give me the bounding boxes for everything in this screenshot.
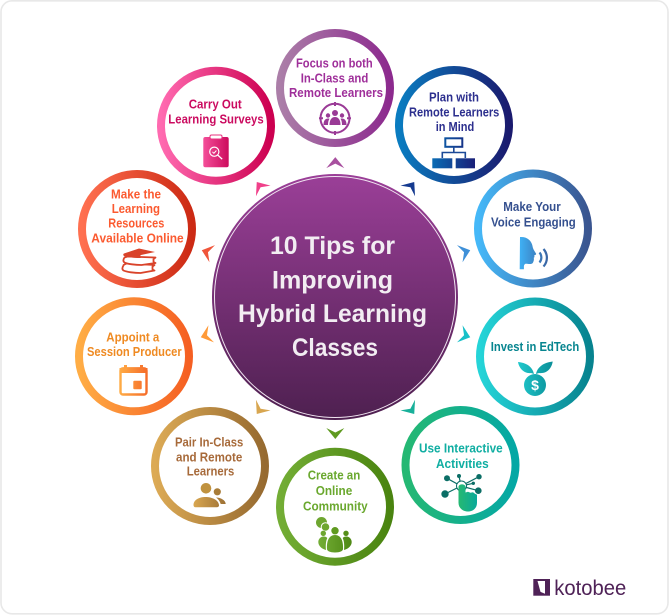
text: pair: Pair In-Class <box>175 436 243 450</box>
arrow: plan <box>400 177 422 196</box>
panel: carry out learning surveys <box>161 71 271 181</box>
arrow: interactive <box>400 400 422 419</box>
icon: community group <box>316 517 352 552</box>
central circle: title <box>212 174 458 420</box>
text: resources: Learning <box>112 202 160 216</box>
panel: make the learning resources available online <box>82 174 192 284</box>
panel: focus on both <box>280 33 390 143</box>
text: appoint: Appoint a <box>106 331 160 345</box>
icon: touch network <box>441 474 482 512</box>
icon: stack of books <box>122 248 156 273</box>
text: interactive: Activities <box>436 457 489 471</box>
arrow: focus <box>326 157 344 168</box>
arrow: resources <box>199 242 215 262</box>
panel: use interactive activities <box>406 410 516 520</box>
panel: invest in edtech <box>480 302 590 412</box>
text: surveys: Learning Surveys <box>168 112 264 126</box>
icon: two people <box>194 483 226 507</box>
text: surveys <box>168 98 264 126</box>
text: plan: Remote Learners <box>409 105 499 119</box>
arrow: surveys <box>249 177 271 196</box>
text: voice <box>491 200 576 230</box>
logo mark <box>533 579 550 596</box>
panel: make your voice engaging <box>478 174 588 284</box>
text: plan: Plan with <box>429 90 479 104</box>
arrow: voice <box>457 242 473 262</box>
text: community <box>303 468 368 514</box>
text: plan <box>409 90 499 134</box>
icon: calendar <box>120 365 148 394</box>
arrow: pair <box>249 400 271 419</box>
icon: hierarchy chart <box>432 138 475 168</box>
panel: pair in-class and remote learners <box>155 411 265 521</box>
text: resources: Make the <box>111 187 161 201</box>
text: community: Community <box>303 500 368 514</box>
icon: speaking head <box>520 237 547 269</box>
logo: kotobee <box>533 577 626 600</box>
logo wordmark: kotobee <box>554 577 626 600</box>
text: interactive <box>419 441 503 471</box>
icon: clipboard with magnifier <box>203 135 229 167</box>
text: focus: In-Class and <box>301 71 368 85</box>
panel: plan with remote learners <box>399 70 509 180</box>
icon: money plant: $ <box>531 377 539 393</box>
icon: people in target <box>319 102 351 135</box>
text: plan: in Mind <box>436 120 474 134</box>
text: appoint: Session Producer <box>87 345 182 359</box>
text: pair <box>175 436 243 479</box>
text: voice: Make Your <box>503 200 561 214</box>
title text: Improving <box>272 266 393 294</box>
text: focus <box>289 57 383 100</box>
text: resources: Available Online <box>91 231 184 245</box>
arrow: community <box>326 428 344 439</box>
panel: appoint a session producer <box>79 301 189 411</box>
text: resources: Resources <box>108 217 164 231</box>
text: resources <box>91 187 184 245</box>
title text: Hybrid Learning <box>238 300 427 328</box>
text: pair: and Remote <box>176 450 242 464</box>
text: community: Create an <box>308 468 360 482</box>
arrow: appoint <box>198 325 214 346</box>
arrow: edtech <box>457 325 473 346</box>
text: pair: Learners <box>187 465 234 479</box>
text: interactive: Use Interactive <box>419 441 503 455</box>
panel: create an online community <box>280 452 390 562</box>
text: surveys: Carry Out <box>189 98 242 112</box>
text: voice: Voice Engaging <box>491 216 576 230</box>
text: appoint <box>87 331 182 359</box>
title text: Classes <box>292 334 378 362</box>
text: edtech: Invest in EdTech <box>491 340 579 354</box>
title text <box>238 232 427 362</box>
title text: 10 Tips for <box>270 232 395 260</box>
text: focus: Focus on both <box>296 57 373 71</box>
text: community: Online <box>316 484 352 498</box>
text: focus: Remote Learners <box>289 86 383 100</box>
